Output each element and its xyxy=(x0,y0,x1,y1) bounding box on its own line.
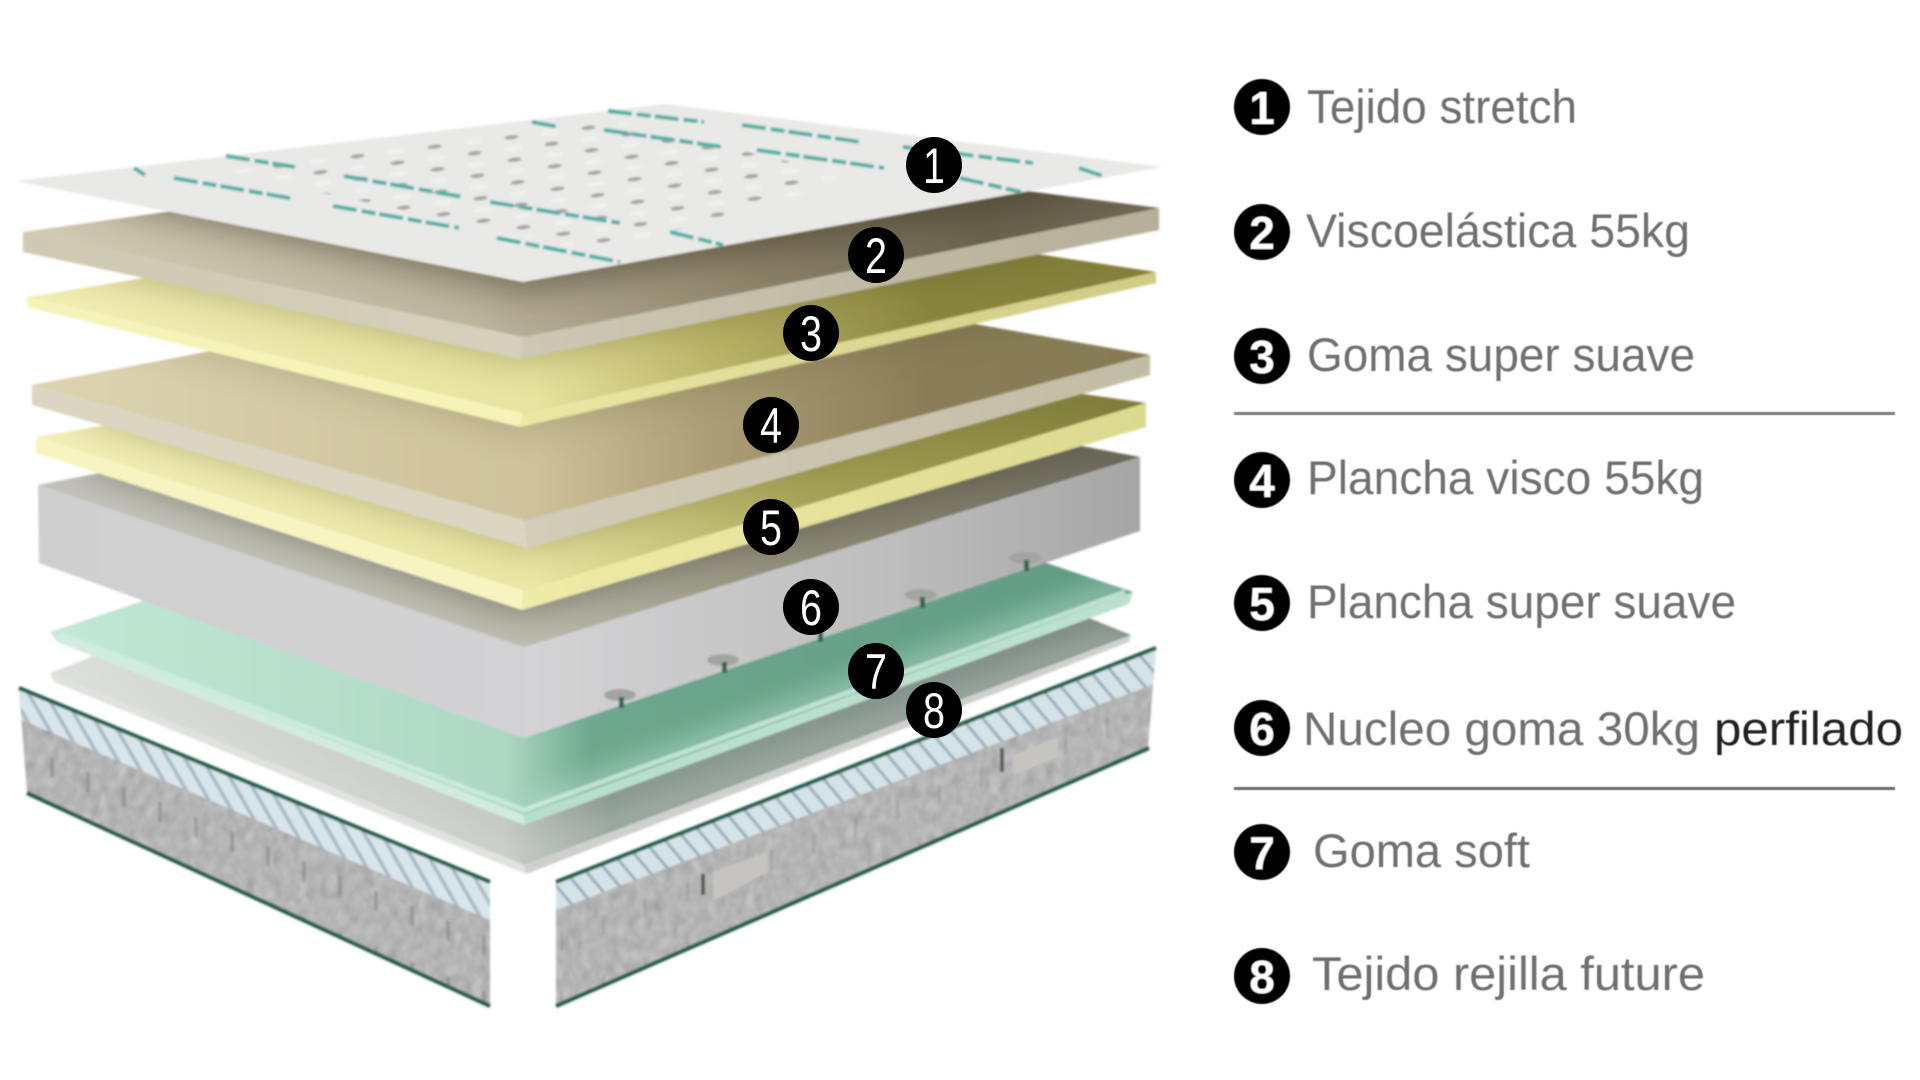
icon: peg 3 xyxy=(818,630,823,642)
layer 5: plancha super suave xyxy=(35,392,1148,612)
icon: peg 4 xyxy=(905,589,937,608)
callout 5 xyxy=(743,499,799,556)
callout 6: 6 xyxy=(800,580,822,636)
callout 5: 5 xyxy=(760,500,782,556)
callout 3: 3 xyxy=(800,306,822,362)
legend item 6: 6 xyxy=(1249,703,1275,755)
mattress exploded diagram xyxy=(15,104,1163,1015)
legend item 7 xyxy=(1234,824,1530,880)
layer 3: goma super suave xyxy=(26,252,1158,428)
callout 2 xyxy=(848,227,904,284)
layer 2: viscoelastica xyxy=(22,190,1160,360)
legend item 6 xyxy=(1234,700,1903,756)
callout 1: 1 xyxy=(923,138,945,194)
legend item 3: Goma super suave xyxy=(1307,328,1695,381)
layer 4: plancha visco xyxy=(31,322,1152,549)
layer 1: tejido stretch cover xyxy=(15,104,1163,282)
callout 7: 7 xyxy=(865,644,887,700)
icon: handle front xyxy=(703,852,768,900)
callout 4 xyxy=(743,397,799,454)
legend item 6: perfilado xyxy=(1714,702,1903,755)
legend item 5: Plancha super suave xyxy=(1307,575,1736,628)
legend item 8: Tejido rejilla future xyxy=(1312,947,1705,1000)
legend item 7: 7 xyxy=(1249,827,1275,879)
callout 6 xyxy=(783,579,839,636)
legend item 4: 4 xyxy=(1249,455,1275,507)
callout 8 xyxy=(906,682,962,739)
icon: peg 1 xyxy=(604,689,636,708)
legend item 7: Goma soft xyxy=(1313,824,1530,877)
icon: peg 5 xyxy=(1009,552,1041,571)
layer 7: goma soft xyxy=(50,562,1134,826)
legend item 2: 2 xyxy=(1249,207,1275,259)
legend item 8: 8 xyxy=(1249,951,1275,1003)
callout 8: 8 xyxy=(923,683,945,739)
callout 3 xyxy=(783,305,839,362)
divider xyxy=(1234,787,1895,790)
panel: right mattress side xyxy=(550,640,1162,1015)
icon: handle back xyxy=(1002,737,1058,775)
divider xyxy=(1234,412,1895,415)
callout 2: 2 xyxy=(865,228,887,284)
legend item 6: Nucleo goma 30kg xyxy=(1303,702,1700,755)
legend item 3: 3 xyxy=(1249,331,1275,383)
icon: peg 2 xyxy=(707,654,739,673)
legend list xyxy=(1234,79,1903,1004)
legend item 2: Viscoelástica 55kg xyxy=(1306,204,1690,257)
legend item 1: Tejido stretch xyxy=(1307,80,1577,133)
panel: left mattress side xyxy=(15,680,495,1015)
callout 7 xyxy=(848,643,904,700)
layer 8: tejido rejilla xyxy=(50,617,1132,874)
legend item 4: Plancha visco 55kg xyxy=(1307,451,1704,504)
layer 6: nucleo goma xyxy=(37,444,1142,739)
callout 4: 4 xyxy=(760,398,782,454)
legend item 1: 1 xyxy=(1249,82,1275,134)
legend item 5: 5 xyxy=(1249,578,1275,630)
callout 1 xyxy=(906,137,962,194)
